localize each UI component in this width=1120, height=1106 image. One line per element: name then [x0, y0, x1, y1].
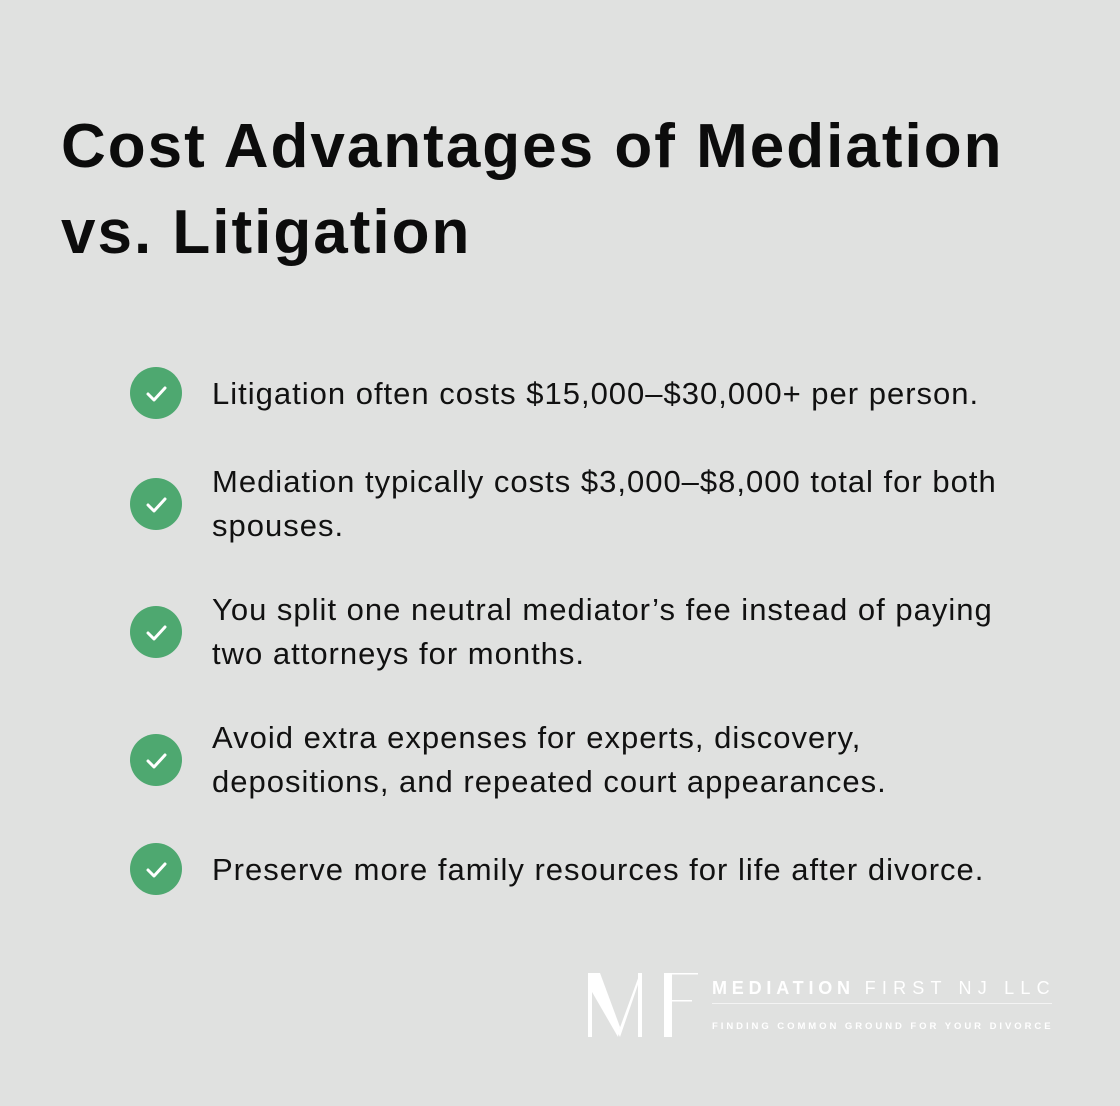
item 4	[130, 720, 887, 799]
item 2	[130, 464, 997, 543]
text: spouses.	[212, 508, 344, 543]
logo text: FINDING COMMON GROUND FOR YOUR DIVORCE	[712, 1021, 1054, 1032]
text: You split one neutral mediator’s fee instead of paying	[212, 592, 993, 627]
logo mark MF	[588, 973, 698, 1037]
logo text: MEDIATION FIRST NJ LLC	[712, 978, 1056, 998]
text	[212, 592, 993, 671]
text	[212, 464, 997, 543]
item 1	[130, 367, 979, 419]
text: Avoid extra expenses for experts, discovery,	[212, 720, 861, 755]
title: Cost Advantages of Mediation	[61, 112, 1003, 181]
text: Preserve more family resources for life after divorce.	[212, 852, 984, 887]
text: two attorneys for months.	[212, 636, 585, 671]
title	[61, 112, 1003, 267]
icon: check	[130, 478, 182, 530]
icon: check	[130, 606, 182, 658]
item 5	[130, 843, 984, 895]
icon: check	[130, 734, 182, 786]
icon: check	[130, 843, 182, 895]
text: Litigation often costs $15,000–$30,000+ per person.	[212, 376, 979, 411]
text	[212, 720, 887, 799]
text: Mediation typically costs $3,000–$8,000 total for both	[212, 464, 997, 499]
logo text	[712, 978, 1056, 1032]
title: vs. Litigation	[61, 198, 471, 267]
logo	[588, 973, 1056, 1037]
icon: check	[130, 367, 182, 419]
item 3	[130, 592, 993, 671]
text: depositions, and repeated court appearances.	[212, 764, 887, 799]
